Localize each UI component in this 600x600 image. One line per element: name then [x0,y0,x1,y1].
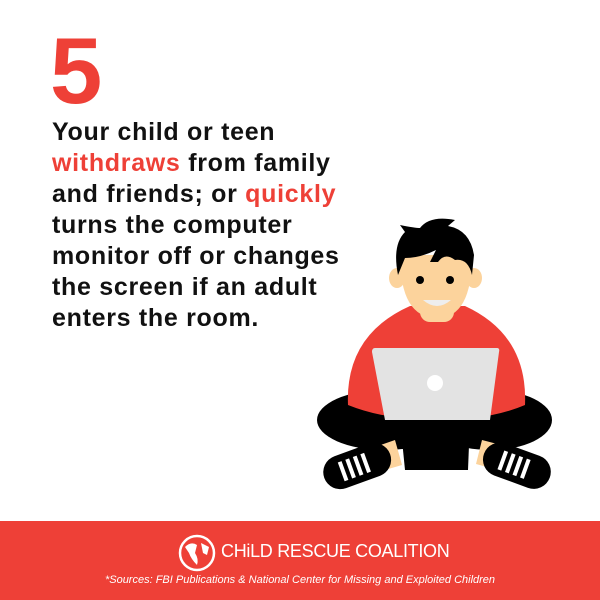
torso [348,306,525,420]
sources: *Sources: FBI Publications & National Center for Missing and Exploited Children [105,574,495,586]
ankles [372,440,402,472]
head [389,268,405,288]
hair [396,219,474,275]
body text: Your child or teen [52,118,275,146]
body text: and friends; or quickly [52,180,336,208]
footer [0,521,600,600]
shoes [318,438,396,494]
laptop [372,348,499,420]
logo: globe [178,534,216,572]
neck [420,300,454,322]
legs [317,390,453,450]
body text: withdraws from family [52,149,331,177]
body text [52,118,340,332]
body text: turns the computer [52,211,292,239]
body text: monitor off or changes [52,242,340,270]
body text: enters the room. [52,304,259,332]
number 5: 5 [50,18,102,123]
body text: the screen if an adult [52,273,317,301]
brand name: CHiLD RESCUE COALITION [221,541,449,561]
